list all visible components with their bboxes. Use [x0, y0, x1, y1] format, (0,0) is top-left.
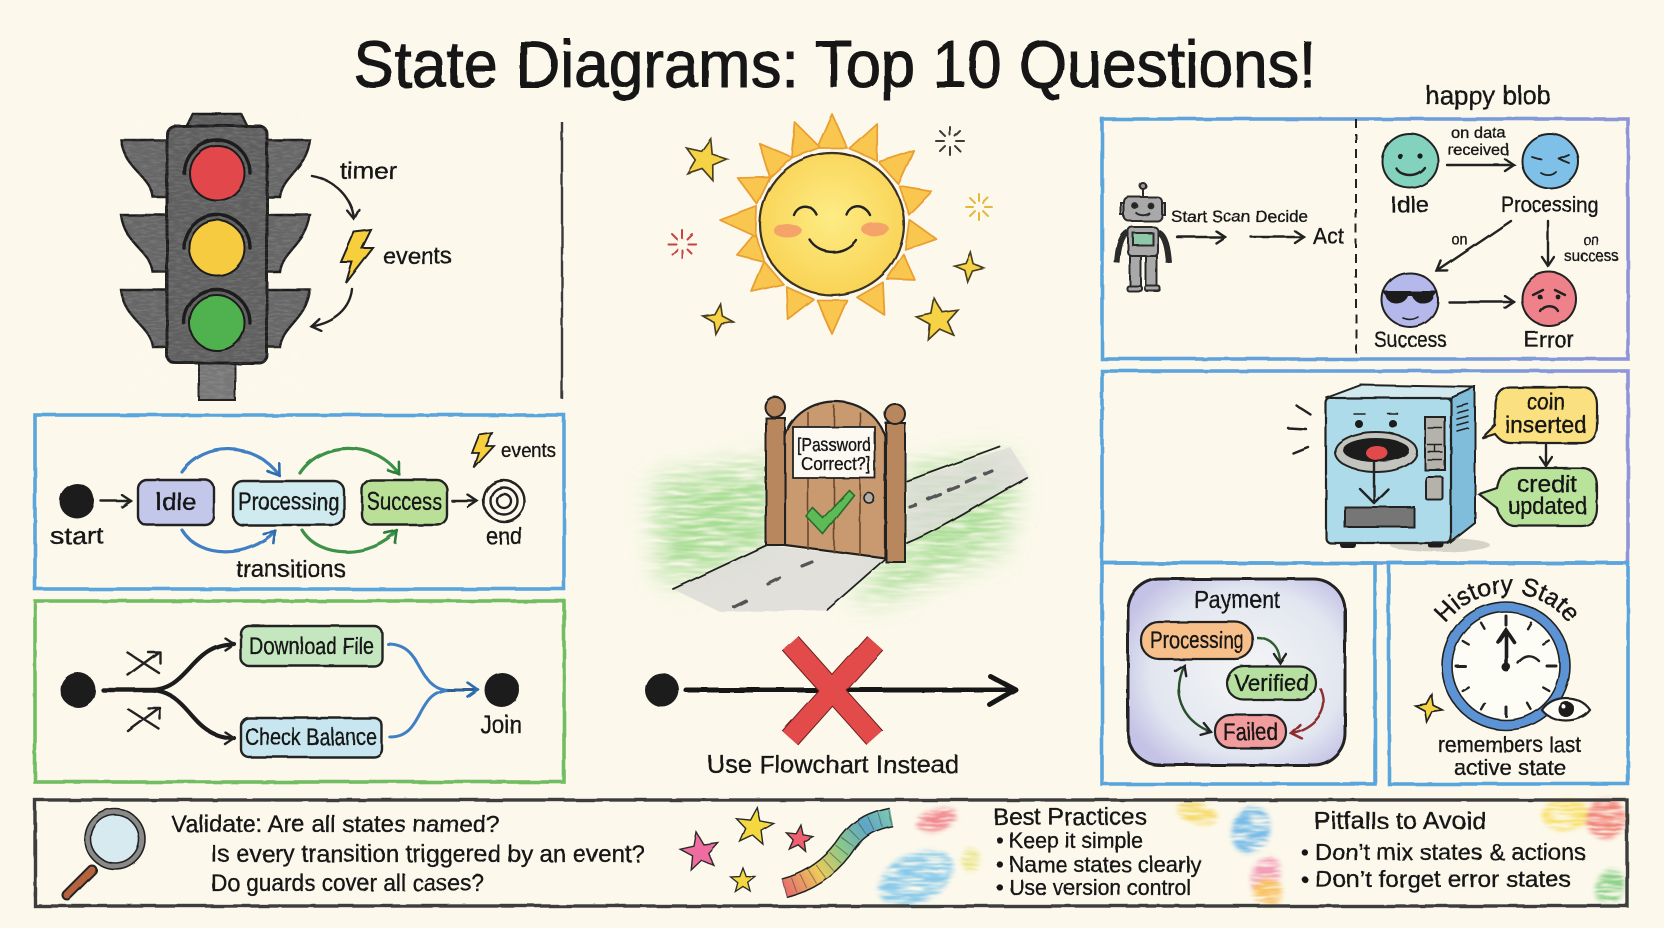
state: Failed: Failed: [1223, 719, 1278, 746]
vertical divider: [561, 122, 563, 399]
end node: [484, 480, 524, 522]
state: Processing: Processing: [238, 488, 339, 516]
label: timer: timer: [340, 158, 397, 185]
blob: Processing: [1501, 134, 1598, 217]
gate sign: Correct?]: [801, 454, 871, 474]
state: Verified: Verified: [1234, 670, 1309, 697]
icon: lightning bolt: [341, 230, 373, 283]
arrows: robot steps: [1177, 236, 1304, 238]
icon: magnifying glass: [67, 809, 145, 895]
merge arrows: [388, 644, 478, 737]
icon: clock: [1442, 602, 1570, 730]
blob: Error: [1522, 272, 1576, 352]
text: best practices: Best Practices: [993, 804, 1147, 831]
blob: Processing: Processing: [1501, 192, 1598, 217]
gate sign: [Password: [797, 435, 871, 455]
join node: [484, 672, 520, 708]
fork arrows: [103, 644, 234, 738]
text: pitfalls to avoid: •: [1301, 867, 1309, 892]
stars around sun: [680, 133, 985, 341]
dashed divider: [1355, 119, 1357, 359]
sparkles: [668, 127, 992, 258]
text: best practices: •: [996, 875, 1004, 900]
transition arrows: [182, 448, 399, 552]
panel: composite state payment: [1102, 563, 1375, 784]
start node: [645, 673, 679, 707]
blob: Error: Error: [1524, 327, 1574, 352]
gate knob: [864, 493, 874, 503]
traffic light illustration: [121, 114, 452, 400]
text: validation questions: Validate: Are all states named?: [171, 811, 499, 838]
label: events: events: [383, 243, 452, 270]
icon: robot: [1117, 183, 1169, 291]
icon: green check: [806, 490, 854, 534]
label: events: events: [501, 440, 556, 462]
icon: eye: [1542, 698, 1590, 720]
state: Download File: Download File: [249, 633, 374, 660]
curved label: History State: History State: [1434, 578, 1576, 622]
label: end: end: [486, 523, 522, 550]
label: on data received: received: [1448, 142, 1509, 159]
grass: [655, 455, 1015, 600]
arrow: idle to processing: [1447, 164, 1514, 166]
sun face: [760, 153, 904, 295]
state: Download File: [241, 626, 382, 666]
arrow: start to idle: [101, 500, 131, 502]
panel: history state: [1386, 560, 1630, 786]
state: Processing: [233, 481, 344, 525]
panel: basic state flow: [35, 415, 564, 589]
text: best practices: Keep it simple: [1009, 828, 1143, 853]
label: Join: Join: [480, 711, 522, 739]
text: pitfalls to avoid: Pitfalls to Avoid: [1314, 808, 1486, 835]
text: best practices: Use version control: [1009, 875, 1191, 900]
icon: shuffle bottom: [128, 708, 160, 731]
blob: Success: [1374, 273, 1447, 352]
text: validation questions: Do guards cover all cases?: [211, 870, 484, 897]
icon: shuffle top: [128, 652, 160, 675]
callout: coin inserted: coin: [1527, 389, 1565, 416]
start node: [60, 484, 94, 518]
text: best practices: •: [996, 828, 1004, 853]
label: on data received: [1448, 125, 1509, 159]
callout: coin inserted: [1482, 387, 1597, 443]
state: Processing: [1141, 622, 1253, 659]
state: Success: [362, 480, 447, 525]
label: Payment: Payment: [1194, 586, 1280, 614]
arrow: success to error: [1449, 301, 1514, 303]
arrow: events: [311, 289, 352, 326]
icon: star: [1413, 692, 1445, 724]
colour scribbles: [870, 797, 1629, 917]
text: best practices: [993, 804, 1201, 900]
rainbow ribbon: [784, 817, 891, 888]
arrow: [686, 676, 1016, 705]
label: start: start: [50, 523, 104, 550]
state: Check Balance: Check Balance: [245, 724, 377, 751]
text: pitfalls to avoid: Don’t forget error states: [1315, 866, 1571, 892]
state: Idle: Idle: [155, 488, 196, 516]
label: on success: [1564, 232, 1619, 265]
gate illustration: [655, 397, 1030, 612]
text: pitfalls to avoid: •: [1301, 840, 1309, 865]
callout: coin inserted: inserted: [1505, 412, 1587, 439]
blob: Idle: Idle: [1390, 192, 1429, 217]
gate posts: [765, 397, 905, 562]
callout: credit updated: [1479, 468, 1597, 526]
blob: Idle: [1382, 134, 1438, 217]
arrow: timer: [312, 176, 354, 219]
sun illustration: [668, 114, 992, 341]
panel: robot and blob states: [1102, 119, 1628, 359]
arrow: success to end: [452, 500, 477, 502]
label: on data received: on data: [1451, 125, 1506, 142]
label: Use Flowchart Instead: Use Flowchart Instead: [707, 751, 959, 779]
label: Start Scan Decide: Start Scan Decide: [1171, 207, 1308, 226]
state: Processing: Processing: [1150, 627, 1244, 654]
arrow: processing to verified: [1257, 638, 1280, 663]
gate sign: [793, 427, 875, 478]
callout: credit updated: updated: [1508, 493, 1587, 520]
label: remembers last active state: [1438, 732, 1581, 780]
crossed out flow: [645, 643, 1016, 779]
callout: credit updated: credit: [1517, 471, 1577, 498]
gate door: [785, 402, 885, 558]
panel: vending machine: [1102, 371, 1628, 563]
icon: red X: [790, 643, 875, 738]
arrow: failed to processing: [1179, 665, 1211, 732]
road: [673, 447, 1030, 612]
icon: vending machine: [1326, 385, 1490, 552]
label: transitions: transitions: [236, 556, 346, 583]
panel: bottom checklist strip: [35, 797, 1629, 917]
arrow: processing to success: [1437, 221, 1511, 271]
label: happy blob: happy blob: [1425, 80, 1551, 110]
title: State Diagrams: Top 10 Questions!: [353, 27, 1316, 101]
blob: Success: Success: [1374, 327, 1447, 352]
panel: fork and join: [35, 601, 564, 782]
text: validation questions: Is every transition triggered by an event?: [211, 841, 645, 868]
state: Idle: [138, 480, 214, 525]
sun rays: [720, 114, 938, 334]
arrow: processing to error: [1547, 221, 1549, 266]
arrow: verified to failed: [1291, 688, 1324, 733]
text: best practices: •: [996, 852, 1004, 877]
text: pitfalls to avoid: Don’t mix states & actions: [1315, 839, 1586, 865]
label: remembers last active state: active state: [1454, 755, 1566, 780]
arrow: coin to credit: [1545, 445, 1547, 466]
label: on success: on: [1583, 232, 1599, 249]
fork start node: [60, 672, 96, 708]
icon: small lightning bolt: [472, 433, 494, 468]
label: remembers last active state: remembers last: [1438, 732, 1581, 757]
label: on: on: [1452, 232, 1468, 249]
stars decoration: [678, 805, 814, 892]
motion lines: [1288, 405, 1310, 453]
state: Success: Success: [367, 488, 442, 516]
text: pitfalls to avoid: [1301, 808, 1586, 892]
text: best practices: Name states clearly: [1009, 852, 1201, 877]
state: Check Balance: [241, 718, 382, 757]
payment container: [1128, 579, 1345, 765]
text: validation questions: [171, 811, 645, 897]
label: on success: success: [1564, 248, 1619, 265]
label: Act: Act: [1313, 223, 1345, 249]
icon: traffic light: [121, 114, 311, 400]
